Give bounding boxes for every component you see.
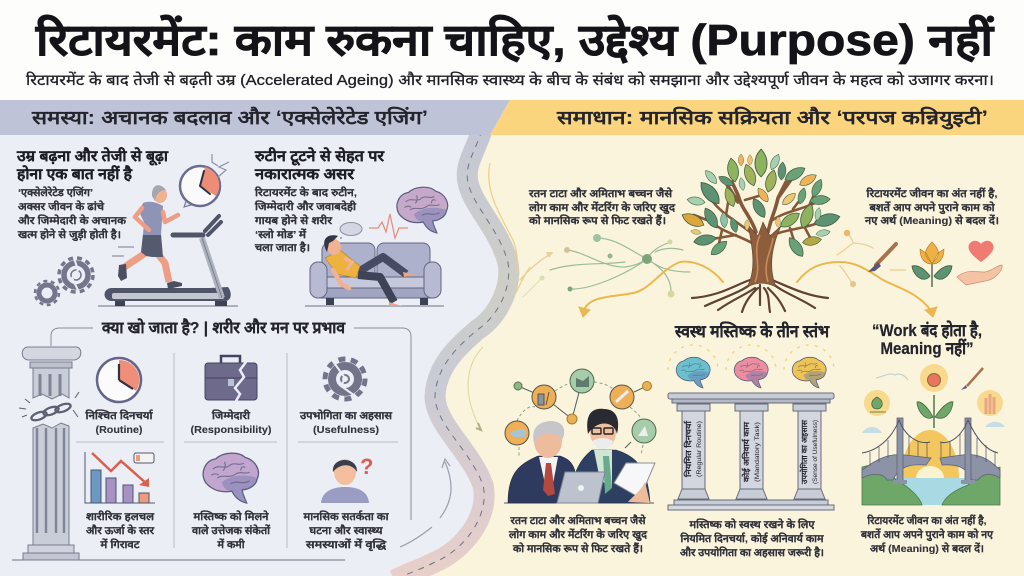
text block: retirement meaning: बशर्ते आप अपने पुराने काम को [868, 201, 996, 215]
icon: heart in hand [957, 241, 1002, 285]
cell: mental alertness: समस्याओं में वृद्धि [305, 538, 387, 552]
panel: solution background [395, 130, 1024, 576]
cell: routine: (Routine) [96, 424, 142, 436]
text block: Tata and Bachchan: रतन टाटा और अमिताभ बच्चन जैसे [528, 187, 673, 200]
section heading: what is lost: क्या खो जाता है? | शरीर और मन पर प्रभाव [101, 318, 346, 337]
cell: decline chart: और ऊर्जा के स्तर [86, 524, 155, 537]
temple with pillars: (Sense of Usefulness) [812, 420, 819, 484]
banner: problem [0, 100, 510, 135]
text block: routine breakdown: ‘स्लो मोड’ में [255, 228, 307, 241]
text block: routine breakdown: गायब होने से शरीर [254, 214, 333, 227]
cell: mental alertness: ? [360, 454, 373, 479]
caption: pillars: नियमित दिनचर्या, कोई अनिवार्य काम [679, 532, 824, 545]
caption: Tata and Bachchan: को मानसिक रूप से फिट रखते हैं। [512, 542, 643, 555]
icon: tree [680, 149, 841, 312]
cell: decline chart: शारीरिक हलचल [86, 510, 155, 523]
text block: ageing: होना एक बात नहीं है [16, 165, 133, 183]
caption: meaning: बशर्ते आप अपने पुराने काम को नए [860, 528, 994, 542]
cell: mental alertness: मानसिक सतर्कता का [302, 510, 390, 523]
text block: retirement meaning [864, 187, 999, 227]
text block: retirement meaning: नए अर्थ (Meaning) से बदल दें। [864, 214, 999, 227]
icon: three brains [668, 345, 834, 388]
cell: routine [84, 358, 154, 436]
caption: Tata and Bachchan: लोग काम और मेंटरिंग के जरिए खुद [508, 528, 647, 542]
text block: retirement meaning: रिटायरमेंट जीवन का अंत नहीं है, [865, 187, 998, 200]
text block: ageing: ‘एक्सेलेरेटेड एजिंग’ [18, 186, 93, 199]
icon: man lying on sofa [305, 235, 444, 306]
caption: meaning: रिटायरमेंट जीवन का अंत नहीं है, [867, 514, 987, 527]
heading: work vs meaning quote: Meaning नहीं” [880, 338, 974, 358]
caption: meaning: अर्थ (Meaning) से बदल दें। [870, 542, 984, 555]
cell: routine: निश्चित दिनचर्या [84, 409, 154, 422]
icon: clock with lightning [180, 154, 229, 207]
cell: usefulness: उपभोगिता का अहसास [299, 409, 393, 422]
caption: Tata and Bachchan: रतन टाटा और अमिताभ बच्चन जैसे [509, 514, 646, 527]
cell: brain signals [191, 453, 271, 551]
text block: ageing: और जिम्मेदारी के अचानक [18, 214, 127, 227]
icon: Tata and Bachchan illustration [504, 369, 656, 503]
caption: pillars [679, 518, 824, 559]
heading: three pillars: स्वस्थ मस्तिष्क के तीन स्तंभ [674, 321, 830, 341]
panel: problem background [0, 135, 530, 576]
temple with pillars [668, 393, 834, 510]
text block: Tata and Bachchan: लोग काम और मेंटरिंग के जरिए खुद [528, 201, 675, 215]
text block: Tata and Bachchan: को मानसिक रूप से फिट रखते हैं। [528, 214, 666, 227]
cell: decline chart: में गिरावट [99, 538, 140, 551]
text block: routine breakdown: रुटीन टूटने से सेहत पर [254, 147, 385, 166]
icon: runner on treadmill [98, 185, 238, 306]
section heading: what is lost [51, 318, 411, 520]
text block: ageing: अक्सर जीवन के ढांचे [18, 200, 105, 213]
icon: neural network branches [520, 234, 723, 317]
temple with pillars: नियमित दिनचर्या [683, 420, 693, 478]
icon: broken gears [35, 258, 93, 305]
text block: routine breakdown [254, 147, 385, 254]
temple with pillars: (Mandatory Task) [754, 422, 761, 482]
text block: routine breakdown: जिम्मेदारी और जवाबदेही [254, 200, 357, 213]
cell: decline chart [85, 452, 155, 551]
subtitle: रिटायरमेंट के बाद तेजी से बढ़ती उम्र (Accelerated Ageing) और मानसिक स्वास्थ्य के बीच के संबंध को समझाना और उद्देश्यपूर्ण जीवन के महत्व को उजागर करना। [26, 71, 994, 90]
icon: sprout flower [912, 242, 952, 287]
cell: usefulness: (Usefulness) [313, 424, 379, 436]
temple with pillars: उपयोगिता का अहसास [799, 419, 809, 485]
text block: ageing: खत्म होने से जुड़ी होती है। [17, 228, 121, 242]
grid dividers [76, 353, 398, 548]
text block: Tata and Bachchan [528, 187, 675, 227]
icon: bridge with sunrise and sprout [862, 364, 1005, 505]
road divider [395, 130, 530, 576]
cell: responsibility: जिम्मेदारी [211, 409, 251, 422]
heading: work vs meaning quote [872, 320, 982, 358]
text block: routine breakdown: चला जाता है। [254, 241, 310, 254]
cell: brain signals: मस्तिष्क को मिलने [192, 510, 270, 523]
caption: pillars: मस्तिष्क को स्वस्थ रखने के लिए [688, 518, 816, 531]
caption: Tata and Bachchan [508, 514, 647, 555]
cell: mental alertness: घटना और स्वास्थ्य [308, 524, 383, 537]
cell: responsibility: (Responsibility) [190, 424, 272, 436]
temple with pillars: कोई अनिवार्य काम [741, 421, 751, 483]
banner: problem: समस्या: अचानक बदलाव और ‘एक्सेलेरेटेड एजिंग’ [31, 106, 428, 129]
text block: routine breakdown: नकारात्मक असर [254, 166, 355, 183]
banner: solution [490, 100, 1024, 135]
title: रिटायरमेंट: काम रुकना चाहिए, उद्देश्य (Purpose) नहीं [35, 14, 995, 65]
heading: work vs meaning quote: “Work बंद होता है, [872, 320, 982, 340]
temple with pillars: (Regular Routine) [696, 421, 703, 477]
text block: routine breakdown: रिटायरमेंट के बाद रुटीन, [254, 186, 357, 199]
text block: ageing: उम्र बढ़ना और तेजी से बूढ़ा [16, 147, 169, 166]
cell: usefulness [299, 359, 393, 436]
cell: responsibility [190, 356, 272, 436]
icon: paintbrush [868, 244, 906, 272]
text block: ageing [16, 147, 169, 242]
caption: meaning [860, 514, 994, 555]
icon: branch arrow right [797, 230, 937, 317]
icon: broken pillar [12, 347, 345, 560]
caption: pillars: और उपयोगिता का अहसास जरूरी है। [680, 546, 824, 559]
cell: brain signals: वाले उत्तेजक संकेतों [191, 524, 271, 537]
banner: solution: समाधान: मानसिक सक्रियता और ‘परपज कन्नियुइटी’ [556, 106, 988, 130]
cell: brain signals: में कमी [216, 538, 246, 551]
cell: mental alertness [302, 454, 390, 552]
icon: brain with pulse [340, 187, 448, 239]
